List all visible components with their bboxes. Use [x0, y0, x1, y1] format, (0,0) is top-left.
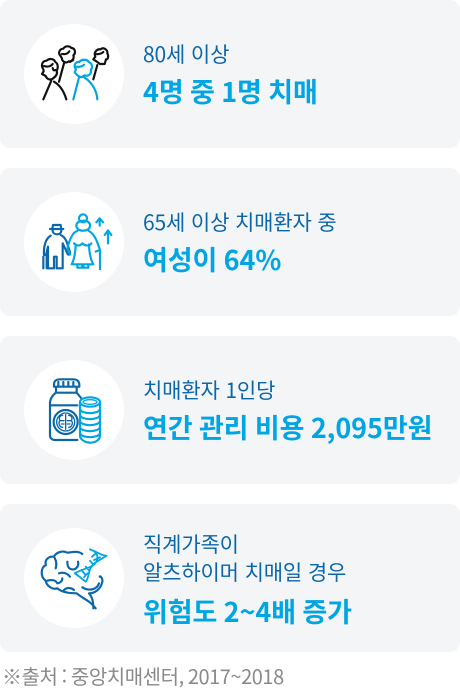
text: 위험도 2~4배 증가: 위험도 2~4배 증가 [143, 591, 352, 630]
text: 알츠하이머 치매일 경우: 알츠하이머 치매일 경우 [143, 557, 346, 587]
text: 80세 이상: 80세 이상 [143, 39, 229, 69]
icon: group of people [24, 24, 124, 124]
icon: brain with DNA [24, 528, 124, 628]
text: 4명 중 1명 치매: 4명 중 1명 치매 [143, 71, 318, 110]
source note: ※출처 : 중앙치매센터, 2017~2018 [2, 661, 284, 690]
text: 직계가족이: 직계가족이 [143, 529, 239, 559]
panel: 치매환자 1인당 [0, 336, 460, 484]
icon: elderly couple with arrows [24, 192, 124, 292]
text: 치매환자 1인당: 치매환자 1인당 [143, 375, 275, 405]
text: 연간 관리 비용 2,095만원: 연간 관리 비용 2,095만원 [143, 407, 432, 446]
text: 65세 이상 치매환자 중: 65세 이상 치매환자 중 [143, 207, 337, 237]
panel: 65세 이상 치매환자 중 [0, 168, 460, 316]
panel: 직계가족이 알츠하이머 [0, 504, 460, 652]
icon: medicine bottle and coins [24, 360, 124, 460]
panel: 80세 이상 [0, 0, 460, 148]
text: 여성이 64%: 여성이 64% [143, 239, 281, 278]
